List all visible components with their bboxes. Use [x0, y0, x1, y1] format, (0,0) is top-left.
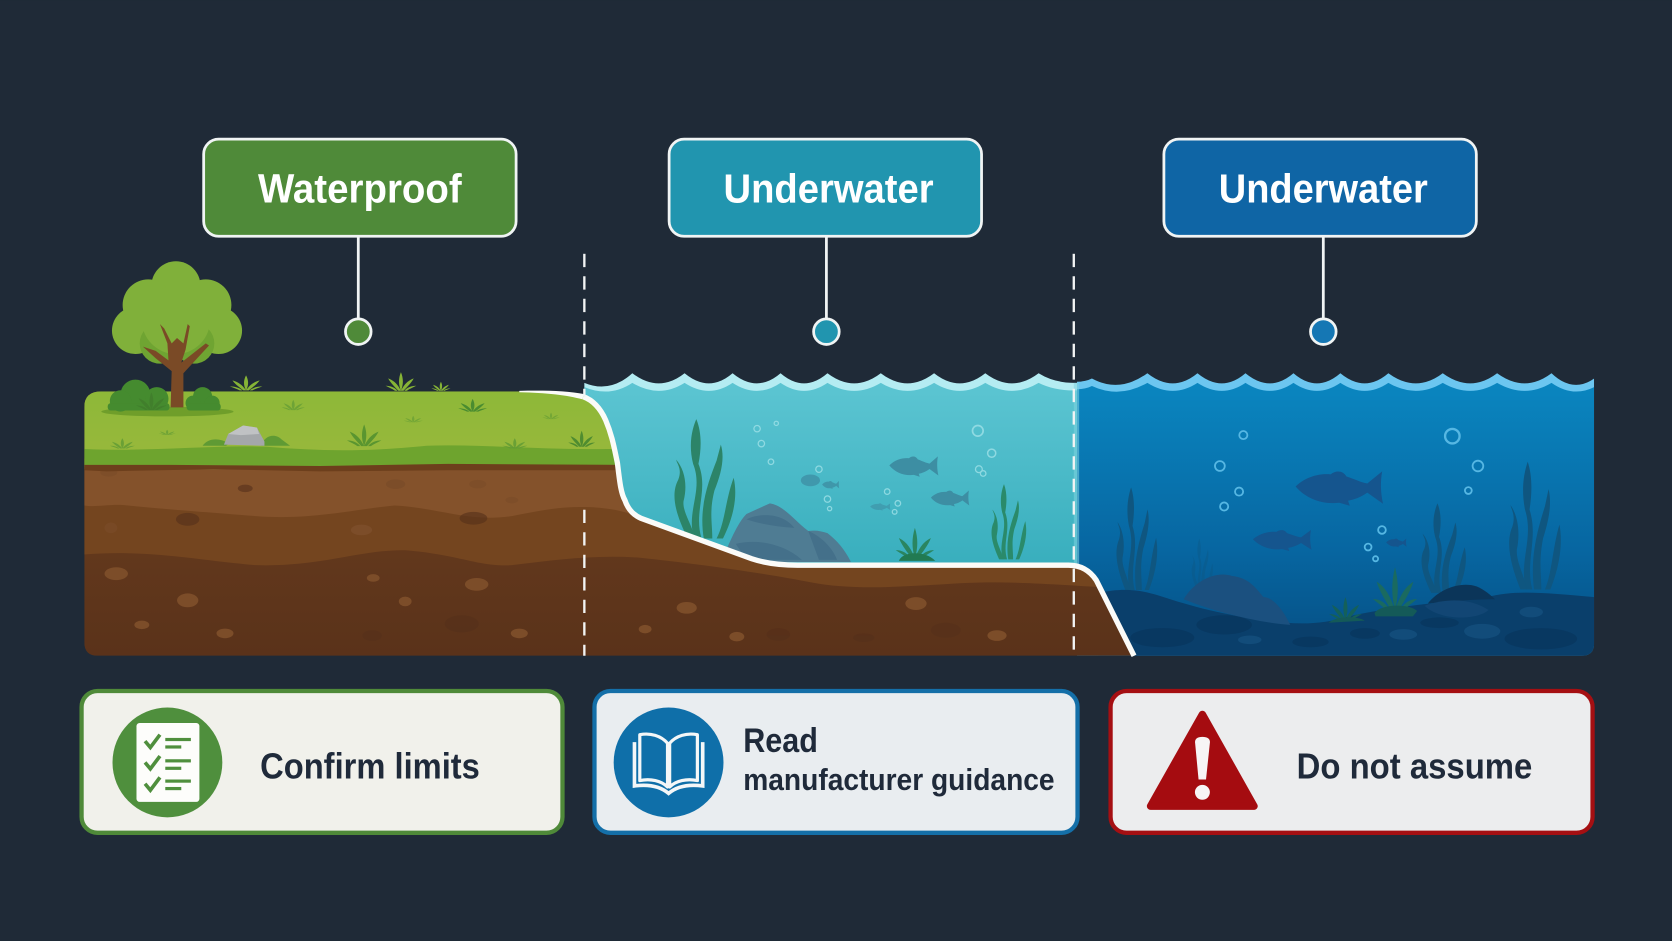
- canopy: [112, 261, 242, 364]
- seaweed: shallow water right: [992, 484, 1026, 559]
- panel: deep water: [1077, 373, 1594, 661]
- grass tufts above ground: [230, 372, 451, 391]
- fish: deep water: [1253, 471, 1406, 551]
- plant: shallow water centre: [896, 528, 935, 561]
- seaweed: shallow water left: [674, 419, 735, 539]
- bush left: [108, 380, 170, 412]
- callout: Underwater shallow: [669, 139, 982, 344]
- seabed: deep water: [1098, 567, 1594, 661]
- bush right: [186, 387, 221, 411]
- soil pebbles: [104, 525, 1006, 642]
- panel: shallow water: [584, 373, 1079, 567]
- fish: shallow water: [801, 456, 969, 511]
- grass tufts on ground: [110, 399, 595, 449]
- callout: Waterproof: [204, 139, 516, 344]
- seaweed: deep water: [1116, 462, 1561, 593]
- callout: Waterproof: Waterproof: [258, 166, 462, 212]
- card: Read manufacturer guidance: [594, 691, 1078, 833]
- zone divider left: [583, 254, 585, 656]
- callout: Underwater deep: [1164, 139, 1476, 344]
- bubbles: deep water: [1215, 429, 1483, 561]
- panel: cross-section landscape: [82, 139, 1594, 833]
- soil layers: [84, 389, 1151, 658]
- bubbles: shallow water: [754, 421, 996, 514]
- shoreline outline: [519, 391, 1134, 656]
- rock on grass: [203, 425, 290, 446]
- card: Read manufacturer guidance: manufacturer guidance: [743, 762, 1055, 797]
- zone divider right: [1073, 254, 1075, 656]
- card: Do not assume: [1111, 691, 1593, 833]
- card: Do not assume: Do not assume: [1297, 745, 1532, 786]
- panel: ground: [84, 384, 1151, 658]
- icon: warning triangle: [1151, 714, 1254, 806]
- card: Confirm limits: [82, 691, 562, 833]
- lighter overlap strip between water zones: [1074, 383, 1079, 565]
- tree: [101, 261, 242, 416]
- icon: book: [614, 708, 724, 817]
- callout: Underwater shallow: Underwater: [724, 166, 934, 212]
- card: Confirm limits: Confirm limits: [260, 745, 480, 786]
- rock: shallow water: [722, 503, 851, 562]
- icon: checklist: [112, 708, 222, 817]
- grass: [84, 391, 616, 472]
- trunk: [143, 324, 209, 407]
- callout: Underwater deep: Underwater: [1219, 166, 1428, 212]
- card: Read manufacturer guidance: Read: [743, 722, 818, 760]
